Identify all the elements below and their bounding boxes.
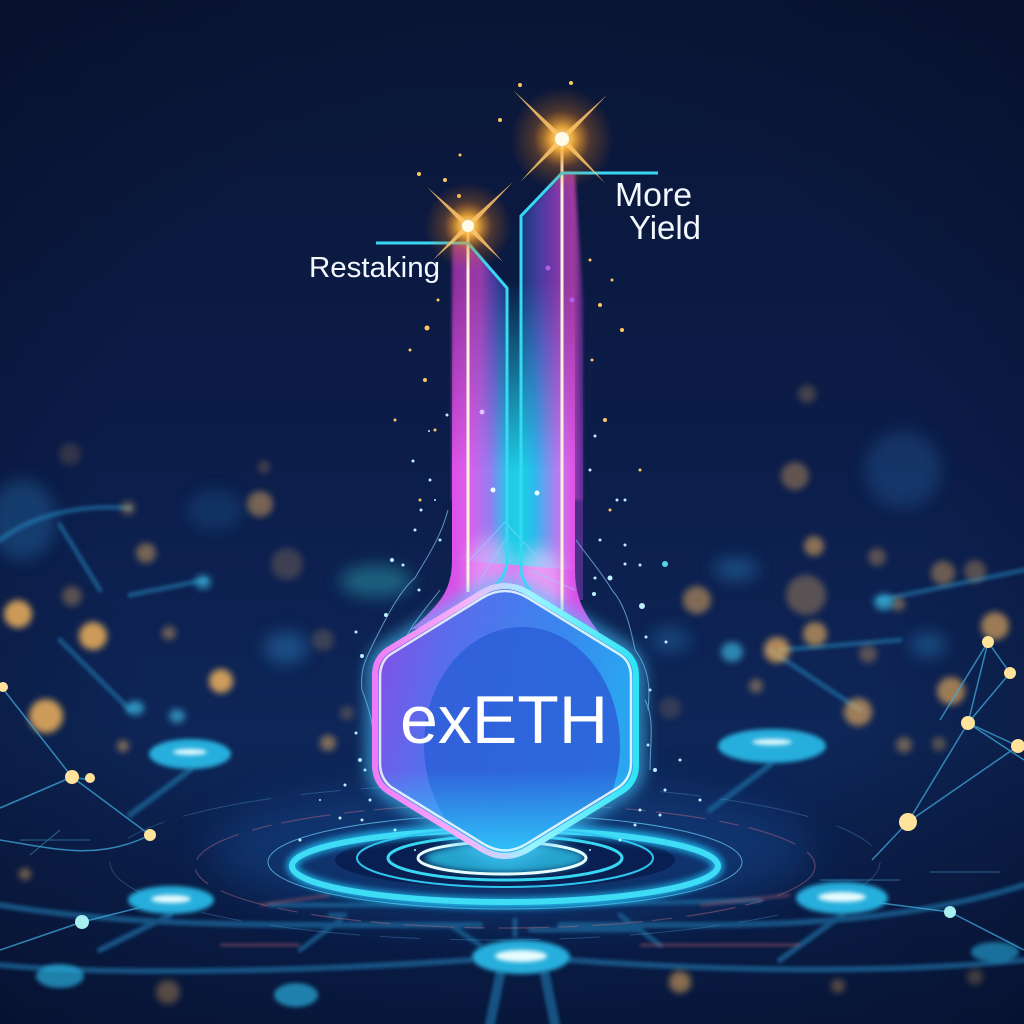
- blurred circuit ground lines: [0, 507, 1024, 1024]
- hexagon inner light line: [380, 591, 631, 850]
- star: more yield: [510, 87, 614, 191]
- label: More Yield: [615, 176, 701, 246]
- star: restaking: [424, 182, 513, 270]
- token name: exETH: [400, 682, 608, 758]
- hexagon token: [375, 586, 636, 863]
- pedestal rings: [292, 829, 718, 903]
- bottom glow: [210, 780, 810, 920]
- line: Restaking leader: [376, 226, 507, 592]
- sharp network nodes: [0, 636, 1024, 929]
- beam flare above hexagon: [410, 537, 605, 640]
- bright lower beams: [452, 288, 583, 600]
- particles: [298, 81, 702, 851]
- wispy electric lines: [362, 510, 651, 770]
- muted upper beams: [452, 173, 583, 500]
- lower cyan glow: [375, 586, 636, 856]
- label: Restaking: Restaking: [309, 252, 440, 284]
- inner swirl: [424, 627, 620, 863]
- radar rings: [20, 784, 1000, 940]
- glowing node discs: [36, 729, 1019, 1007]
- label: More Yield: More: [615, 176, 692, 213]
- label: More Yield: Yield: [629, 209, 701, 246]
- blurred bokeh lights: [0, 385, 1009, 1004]
- line: More Yield leader: [521, 140, 658, 612]
- hexagon outline: [375, 586, 636, 856]
- reddish circuit traces: [220, 895, 800, 945]
- sharp network lines: [0, 642, 1024, 950]
